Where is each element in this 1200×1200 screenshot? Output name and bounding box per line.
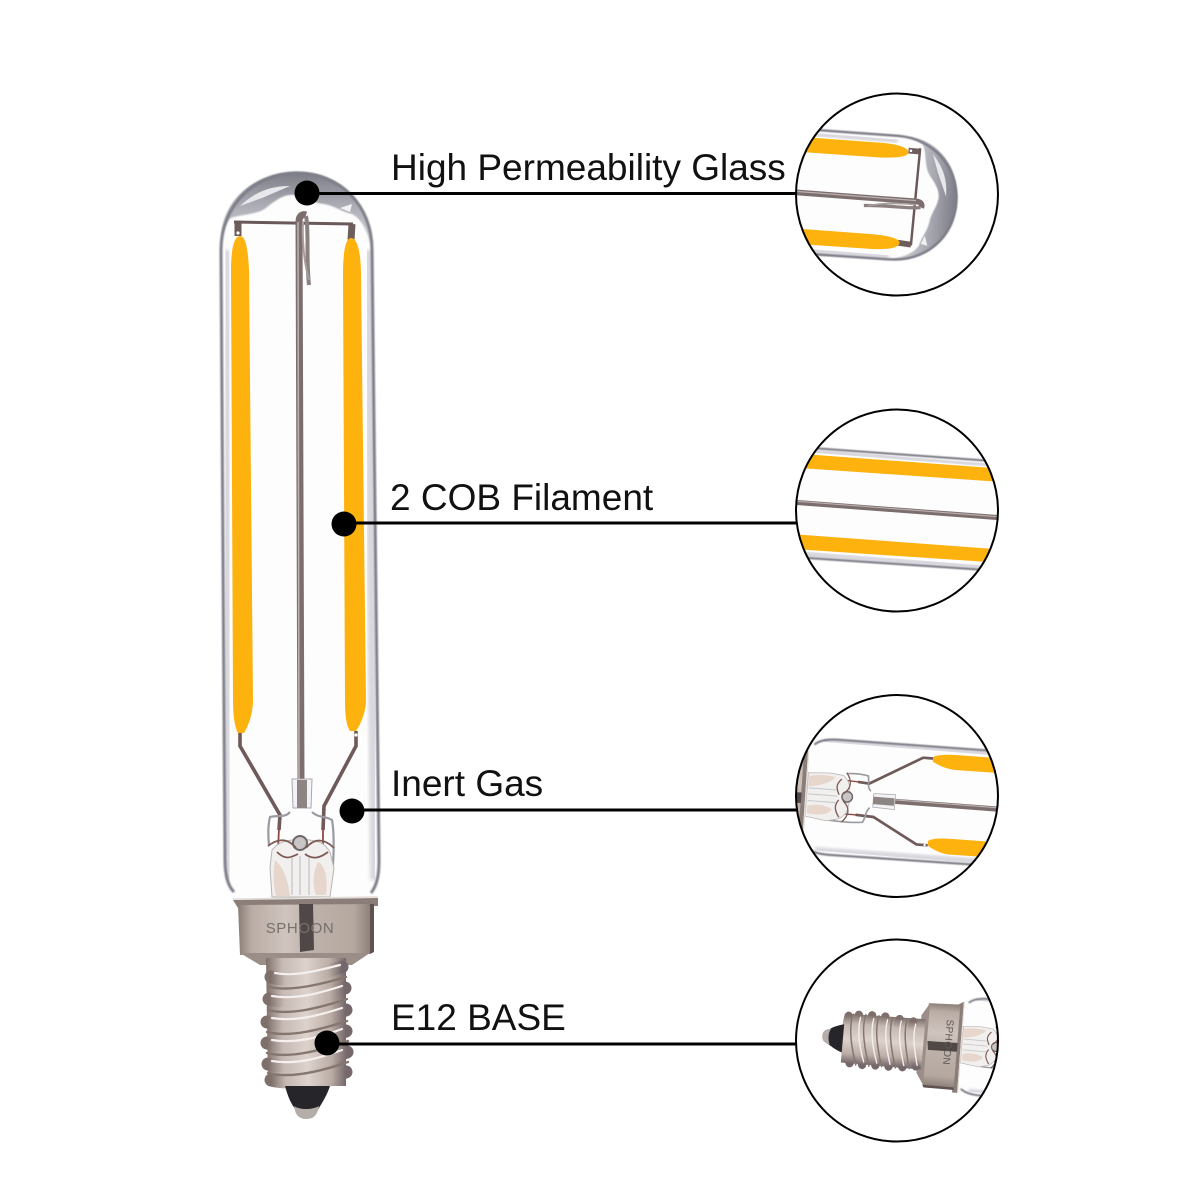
callout: 2 COB Filament [332, 477, 797, 536]
panel: zoomed E12 base detail: SPHOON [940, 1019, 955, 1065]
panel: main T6 bulb photograph [220, 172, 380, 1119]
callout: E12 BASE [314, 997, 797, 1056]
panel: zoomed dome detail [795, 92, 999, 296]
panel: zoomed E12 base detail [795, 938, 999, 1142]
callout: Inert Gas: Inert Gas [391, 763, 543, 804]
callout: 2 COB Filament: 2 COB Filament [390, 477, 654, 518]
panel: zoomed filament detail [795, 408, 999, 612]
brand text on bulb collar: SPHOON [266, 920, 334, 937]
bulb body [220, 172, 380, 1119]
callout: Inert Gas [340, 763, 797, 824]
callout: E12 BASE: E12 BASE [391, 997, 566, 1038]
callout: High Permeability Glass [294, 147, 797, 206]
panel: zoomed stem detail [795, 694, 999, 898]
callout: High Permeability Glass: High Permeability Glass [391, 147, 786, 188]
